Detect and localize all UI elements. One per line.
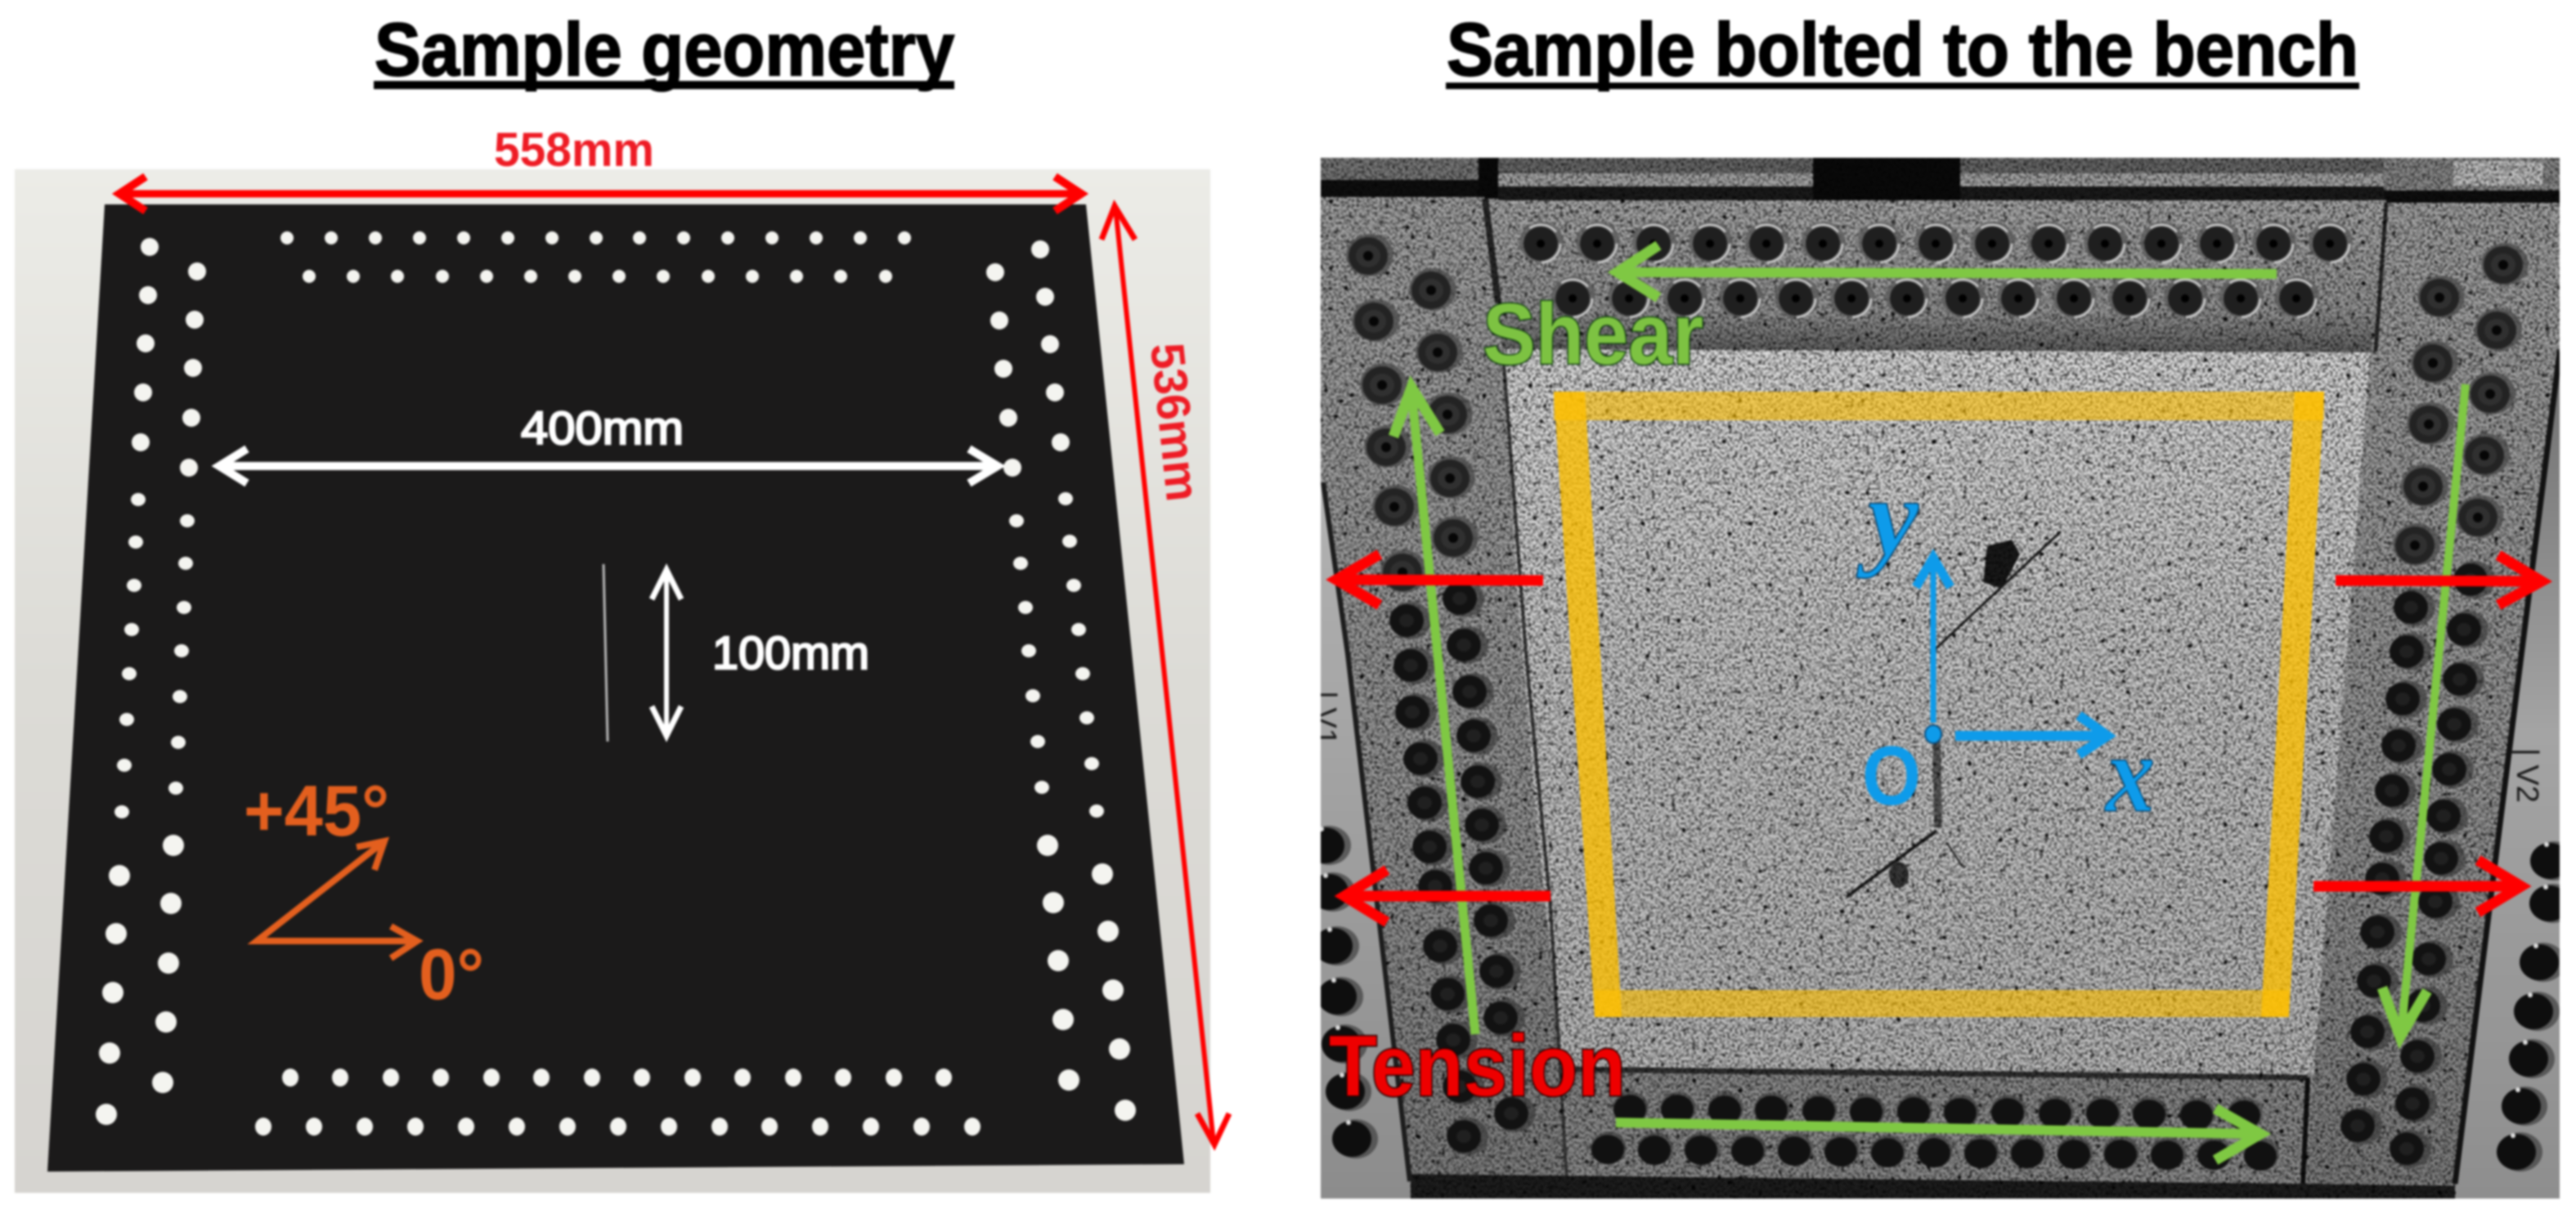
label: Shear: Shear	[1483, 286, 1703, 383]
arrow: left shear	[1393, 388, 1475, 1034]
crack line	[604, 564, 608, 742]
orientation arrows	[257, 841, 417, 958]
bottom clamp plate	[1564, 1069, 2313, 1185]
handwritten plate label V1: | V1	[1308, 691, 1342, 746]
arrow: top shear	[1618, 245, 2277, 298]
arrow: 400mm dimension	[219, 449, 998, 483]
bolts: bottom plate rows	[1591, 1091, 2279, 1171]
axis y arrow	[1916, 558, 1950, 723]
speckled specimen	[1504, 349, 2370, 1076]
title: Sample geometry: Sample geometry	[375, 8, 954, 92]
label: 100mm: 100mm	[712, 627, 869, 679]
label: 558mm: 558mm	[494, 123, 654, 177]
bottom frame of the bench	[1411, 1174, 2455, 1199]
handwritten plate label V2: | V2	[2510, 748, 2544, 803]
arrow: 558mm dimension	[119, 177, 1081, 211]
right clamp plate	[2306, 803, 2497, 1184]
blue coordinate axes	[1856, 456, 2155, 836]
bolt holes: bottom rows	[255, 1069, 981, 1136]
label: 536mm: 536mm	[1140, 341, 1209, 504]
arrow: lower right tension	[2313, 860, 2521, 912]
photo background	[15, 169, 1210, 1193]
red tension arrows	[1336, 554, 2542, 922]
arrow: 536mm dimension	[1102, 206, 1229, 1145]
arrow: 100mm dimension	[652, 570, 681, 736]
bolts: right plate columns	[2340, 243, 2529, 1167]
bolts: top plate rows	[1519, 222, 2353, 317]
axis label x: x	[2104, 713, 2155, 836]
origin dot	[1925, 725, 1941, 743]
label: Tension: Tension	[1329, 1018, 1626, 1114]
arrow: upper right tension	[2336, 555, 2542, 605]
bolts: left plate columns	[1346, 234, 1536, 1155]
axis x arrow	[1955, 715, 2107, 755]
bolt holes: top rows	[280, 231, 911, 283]
dark burn marks near crack tips	[1889, 540, 2020, 888]
outer bench bolt holes	[1305, 826, 2576, 1172]
green shear arrows	[1393, 245, 2466, 1160]
top frame of the bench	[1319, 156, 2561, 204]
left clamp plate	[1371, 195, 1565, 1176]
panel: sample bolted to the bench photo	[1305, 158, 2576, 1199]
black sample plate	[47, 204, 1184, 1172]
label: 400mm: 400mm	[521, 402, 684, 455]
title: Sample bolted to the bench: Sample bolted to the bench	[1447, 8, 2358, 92]
speckle texture, coarse	[1321, 196, 2560, 1199]
clamp plate edge lines	[1485, 199, 2386, 1185]
bolt holes: right columns	[986, 240, 1136, 1121]
top clamp plate	[1484, 200, 2386, 353]
speckle texture, fine	[1321, 158, 2560, 1199]
panel: sample geometry photo	[15, 123, 1229, 1193]
bolt holes: left columns	[96, 238, 206, 1125]
label: +45 degrees: +45°	[244, 770, 389, 851]
smooth outer bench zones	[1321, 352, 2560, 1199]
label: 0 degrees: 0°	[419, 934, 484, 1015]
axis label y: y	[1856, 456, 1919, 579]
bench background	[1320, 198, 2458, 1199]
arrow: right shear	[2382, 384, 2466, 1037]
arrow: upper left tension	[1336, 554, 1543, 605]
yellow region of interest frame	[1554, 392, 2324, 1017]
arrow: lower left tension	[1344, 870, 1551, 922]
arrow: bottom shear	[1616, 1109, 2260, 1160]
origin label O: O	[1862, 729, 1921, 822]
specimen notch marks and crack	[1847, 531, 2061, 897]
